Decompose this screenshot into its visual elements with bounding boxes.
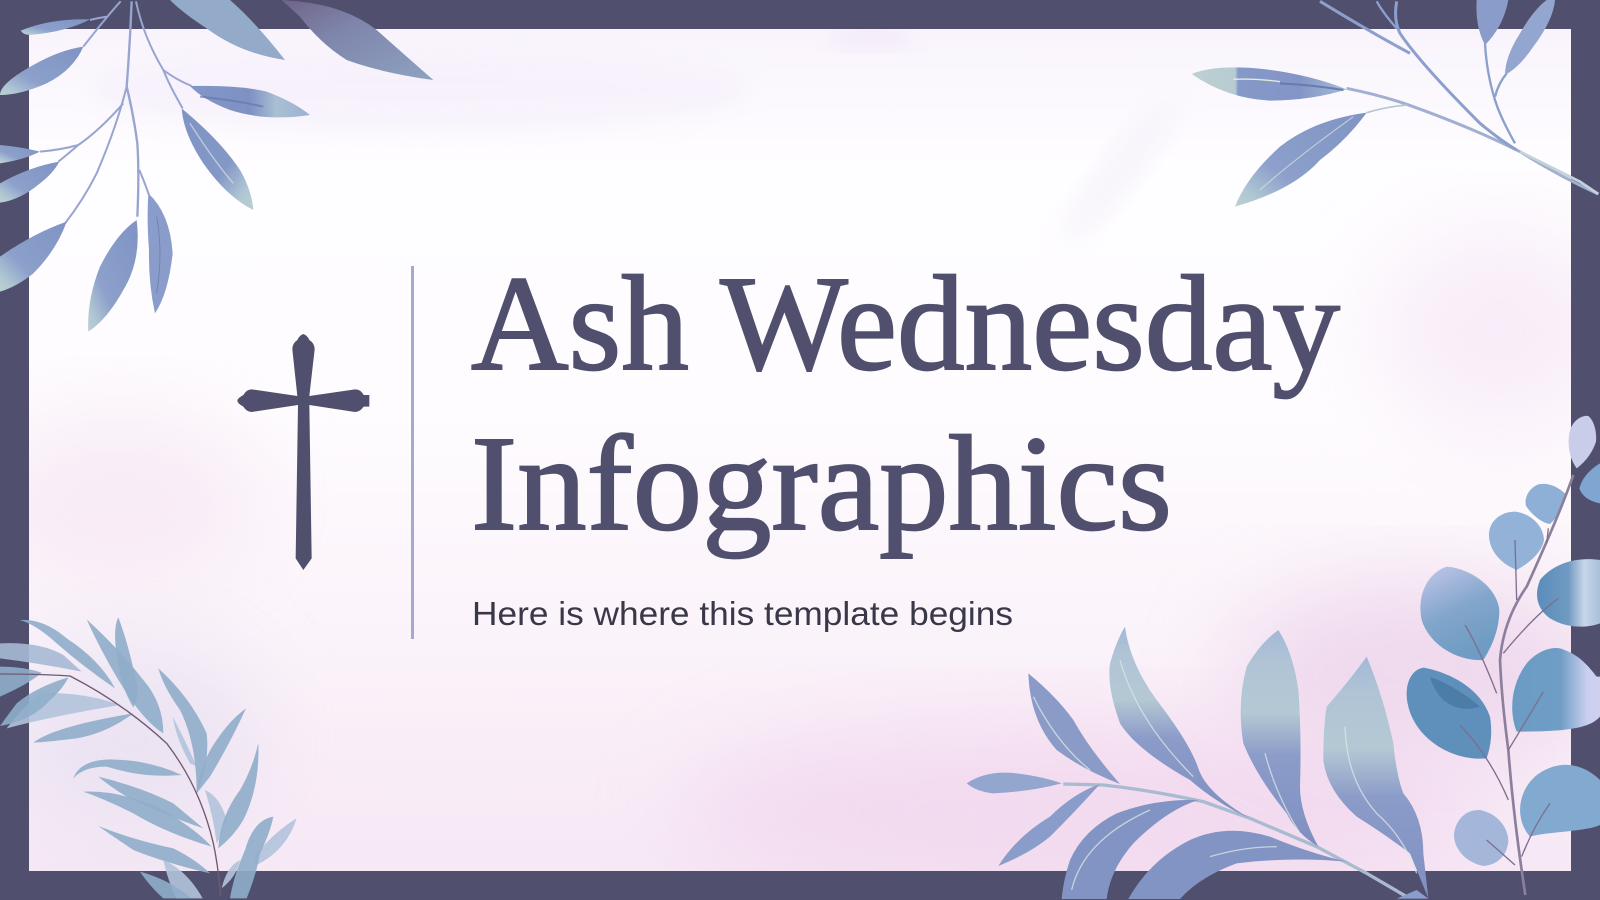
vertical divider: [411, 266, 414, 639]
subtitle: Here is where this template begins: [472, 595, 1013, 632]
leaf spray: bottom right eucalyptus: [1407, 416, 1600, 895]
leaf spray: bottom centre: [967, 627, 1428, 899]
title: Ash Wednesday: [471, 249, 1340, 399]
leaf spray: top right: [1192, 0, 1598, 207]
title: [471, 249, 1340, 559]
title: Infographics: [471, 409, 1172, 559]
leaf spray: bottom left: [0, 617, 297, 898]
leaf spray: top left: [0, 0, 433, 332]
cross icon: [237, 334, 369, 570]
